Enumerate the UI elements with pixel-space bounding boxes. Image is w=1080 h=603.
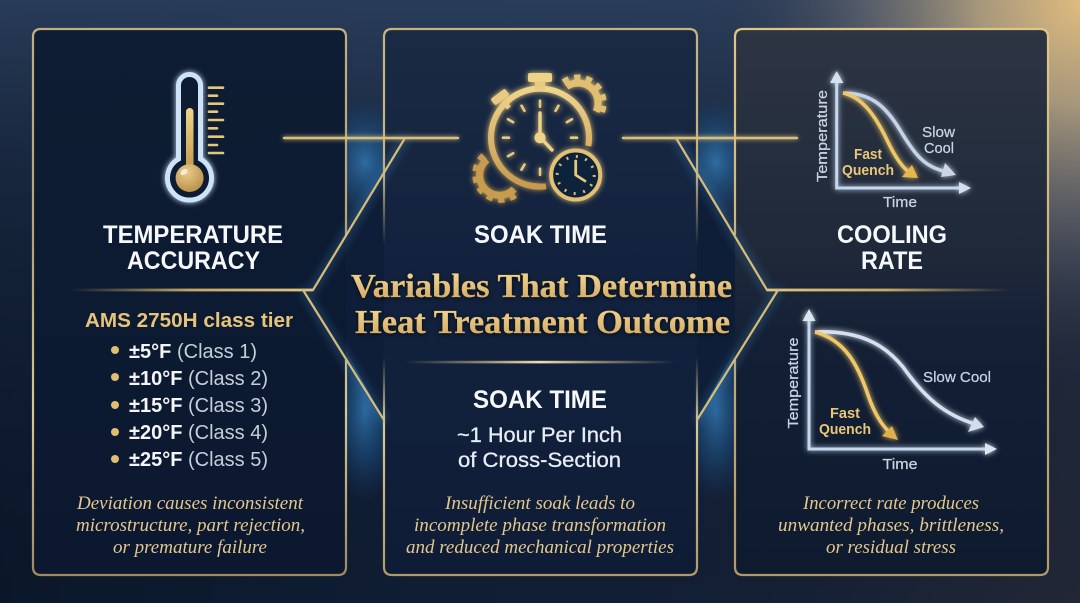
note: insufficient soak: incomplete phase transformation [414, 515, 666, 536]
chart: cooling curves small: Time [883, 194, 917, 211]
note: temperature deviation: Deviation causes inconsistent [76, 493, 304, 514]
soak time detail: ~1 Hour Per Inch [457, 424, 622, 447]
heading: cooling rate [837, 221, 947, 275]
title rule [405, 361, 675, 363]
AMS class tier list: ±20°F [129, 422, 182, 444]
AMS class tier list [85, 309, 293, 471]
AMS class tier list: (Class 4) [188, 422, 268, 444]
panel: temperature accuracy [33, 29, 346, 575]
soak time detail [457, 386, 622, 472]
panel: soak time [384, 29, 697, 575]
note: temperature deviation: microstructure, part rejection, [76, 515, 305, 536]
chart: cooling curves small: Temperature [814, 90, 831, 182]
heading: cooling rate: COOLING [837, 221, 947, 249]
heading: temperature accuracy: ACCURACY [127, 247, 260, 275]
AMS class tier list: ±10°F [129, 368, 182, 390]
chart: cooling curves large [785, 309, 997, 473]
title: Heat Treatment Outcome [355, 304, 730, 341]
chart: cooling curves large: Quench [819, 421, 871, 438]
heading: soak time: SOAK TIME [474, 221, 607, 249]
chart: cooling curves large: Time [882, 456, 918, 473]
icon: stopwatch with gears [476, 73, 603, 200]
AMS class tier list: (Class 1) [177, 341, 257, 363]
title: Variables That Determine [351, 268, 732, 305]
AMS class tier list: ±25°F [129, 449, 182, 471]
AMS class tier list: ±5°F [129, 341, 171, 363]
chart: cooling curves small: Fast [854, 146, 882, 163]
heading: cooling rate: RATE [861, 247, 923, 275]
note: incorrect rate: Incorrect rate produces [802, 493, 979, 514]
note: insufficient soak: and reduced mechanical properties [406, 537, 674, 558]
heading: temperature accuracy [103, 221, 283, 275]
chart: cooling curves small: Quench [842, 162, 894, 179]
note: incorrect rate: unwanted phases, brittleness, [778, 515, 1004, 536]
chart: cooling curves small: Slow [922, 124, 955, 141]
central hexagon backdrop [313, 138, 767, 420]
AMS class tier list: ±15°F [129, 395, 182, 417]
note: insufficient soak [406, 493, 674, 558]
chart: cooling curves large: Slow Cool [923, 369, 991, 386]
icon: thermometer [168, 74, 223, 200]
chart: cooling curves large: Temperature [785, 338, 802, 428]
AMS class tier list: (Class 5) [188, 449, 268, 471]
AMS class tier list: (Class 2) [188, 368, 268, 390]
soak time detail: of Cross-Section [458, 449, 621, 472]
note: incorrect rate [778, 493, 1004, 558]
note: incorrect rate: or residual stress [826, 537, 956, 558]
AMS class tier list: AMS 2750H class tier [85, 309, 293, 332]
AMS class tier list: (Class 3) [188, 395, 268, 417]
heading: temperature accuracy: TEMPERATURE [103, 221, 283, 249]
panel: cooling rate [735, 29, 1048, 575]
note: temperature deviation [76, 493, 305, 558]
chart: cooling curves small [814, 71, 971, 211]
note: insufficient soak: Insufficient soak leads to [444, 493, 635, 514]
chart: cooling curves large: Fast [830, 405, 860, 422]
soak time detail: SOAK TIME [473, 386, 607, 414]
hexagon frame and connector lines [70, 138, 1010, 420]
note: temperature deviation: or premature failure [113, 537, 267, 558]
title [351, 268, 732, 341]
chart: cooling curves small: Cool [924, 140, 954, 157]
